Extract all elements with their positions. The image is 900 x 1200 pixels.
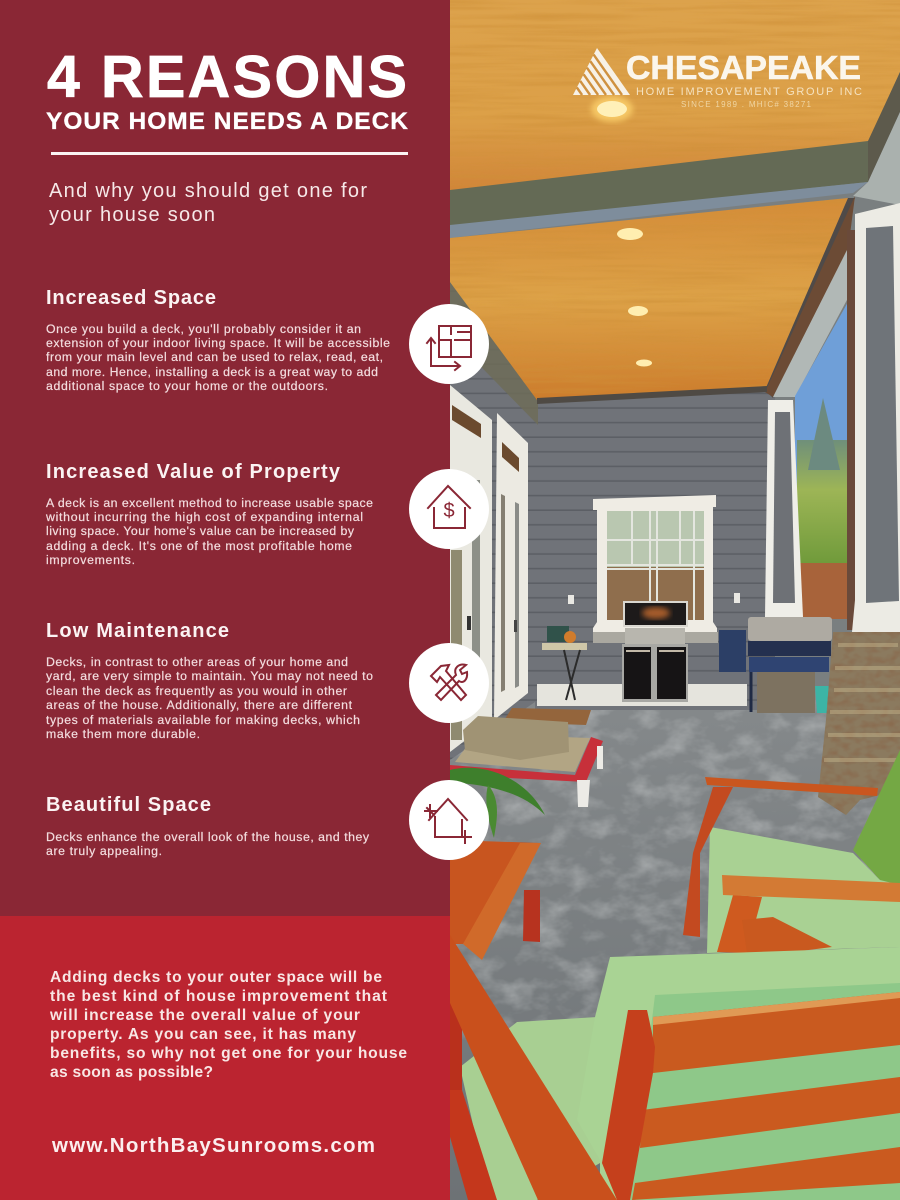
ceiling edge right	[765, 198, 855, 398]
lower ceiling	[450, 198, 848, 400]
light grey fascia	[773, 248, 848, 397]
legs	[577, 746, 603, 807]
body text	[45, 496, 373, 567]
closing text: benefits, so why not get one for your house	[50, 1045, 407, 1062]
body text: extension of your indoor living space. It will be accessible	[46, 336, 390, 350]
large column	[818, 203, 900, 815]
blue lower	[749, 657, 829, 672]
column trim	[765, 400, 803, 617]
section: increased space	[46, 287, 390, 393]
left panel	[0, 0, 450, 916]
section: low maintenance	[46, 620, 373, 741]
right soffit lower	[765, 196, 855, 397]
stone base	[818, 632, 900, 815]
rear leg	[683, 787, 733, 937]
door glass right	[515, 502, 519, 688]
stone highlights	[824, 645, 900, 760]
column panel	[866, 226, 899, 603]
bottom panel	[0, 916, 450, 1200]
grill	[593, 602, 718, 702]
back wall	[535, 385, 775, 710]
logo name: CHESAPEAKE	[626, 49, 861, 86]
front leg	[717, 895, 762, 953]
body text	[46, 830, 370, 858]
subtitle	[49, 180, 367, 226]
door 1	[450, 385, 492, 752]
small column	[765, 400, 803, 617]
leaves	[450, 768, 545, 815]
icon: crossed tools	[409, 643, 489, 723]
slat 3	[632, 1147, 900, 1200]
control panel	[625, 628, 685, 644]
closing text: as soon as possible?	[50, 1064, 213, 1081]
light 2	[617, 228, 643, 240]
door handle	[514, 620, 517, 632]
photo base	[450, 72, 900, 690]
lid	[624, 602, 687, 626]
door handle	[467, 616, 471, 630]
slat 1 top edge	[653, 992, 900, 1025]
cushion bed	[450, 716, 603, 807]
right soffit upper	[868, 72, 900, 182]
table legs	[564, 650, 580, 700]
sky and trees view	[795, 302, 848, 619]
conifer	[808, 398, 840, 470]
body text: are truly appealing.	[46, 844, 162, 858]
upper ceiling grain	[450, 0, 897, 118]
orange pot	[564, 631, 576, 643]
side table	[450, 840, 541, 960]
teal bucket	[815, 686, 829, 713]
window	[593, 495, 717, 640]
icon: floor plan	[409, 304, 489, 384]
body text: types of materials available for making decks, which	[46, 713, 360, 727]
body text: clean the deck as frequently as you would in other	[46, 684, 347, 698]
slat 1	[653, 992, 900, 1073]
logo since: SINCE 1989 . MHIC# 38271	[681, 100, 812, 109]
body text: yard, are very simple to maintain. You may not need to	[46, 669, 373, 683]
back cushion	[577, 947, 900, 1200]
door frame	[450, 385, 492, 752]
icon: house with dollar	[409, 469, 489, 549]
control box	[719, 630, 746, 672]
lower ceiling grain	[452, 232, 802, 382]
body text: from your main level and can be used to relax, read, eat,	[46, 350, 383, 364]
support block	[742, 917, 832, 953]
section: beautiful space	[46, 794, 370, 858]
back cushion	[853, 750, 900, 885]
body text: adding a deck. It's one of the most profitable home	[46, 539, 352, 553]
body text: Decks enhance the overall look of the house, and they	[46, 830, 370, 844]
side shelves	[593, 632, 718, 643]
handles	[626, 650, 684, 652]
body text: make them more durable.	[46, 727, 200, 741]
front arm	[722, 875, 900, 902]
stone texture	[818, 632, 900, 815]
door glass right	[472, 480, 480, 658]
lower leaf	[486, 785, 497, 838]
website url: www.NorthBaySunrooms.com	[51, 1134, 375, 1157]
window muntins	[607, 511, 704, 620]
white trim	[852, 203, 900, 632]
column panel	[773, 412, 795, 603]
cabinet doors	[624, 647, 686, 699]
body text: and more. Hence, installing a deck is a great way to add	[46, 365, 378, 379]
body text: additional space to your home or the outdoors.	[46, 379, 328, 393]
heading: Low Maintenance	[46, 620, 229, 642]
floor texture	[450, 700, 900, 1040]
door frame	[494, 413, 528, 720]
silver lid	[748, 617, 832, 641]
logo tagline: HOME IMPROVEMENT GROUP INC	[636, 86, 862, 98]
subtitle: your house soon	[49, 204, 215, 226]
table leg	[523, 890, 540, 942]
photo background: floor	[450, 692, 826, 1200]
left wall	[450, 368, 535, 760]
smoker	[719, 617, 832, 713]
body text: A deck is an excellent method to increase usable space	[46, 496, 373, 510]
closing text: property. As you can see, it has many	[50, 1026, 356, 1043]
photo: covered deck	[450, 0, 900, 1200]
light 3	[628, 306, 648, 316]
ceiling bottom edge	[537, 386, 767, 404]
left wall upper shading	[450, 282, 538, 425]
body text: without incurring the high cost of expanding internal	[45, 510, 363, 524]
body text	[46, 655, 373, 741]
window glass lower	[607, 567, 704, 620]
sky	[795, 304, 847, 486]
window trim	[593, 495, 717, 640]
switch plates	[568, 593, 740, 604]
blue drum	[748, 641, 831, 656]
fence	[798, 563, 848, 619]
ceiling lights	[591, 96, 652, 366]
body text: Decks, in contrast to other areas of your home and	[46, 655, 348, 669]
front chair	[450, 935, 900, 1200]
beam side	[450, 141, 868, 226]
icon: sparkling house	[409, 780, 489, 860]
body text: living space. Your home's value can be increased by	[46, 524, 355, 538]
upper ceiling	[450, 0, 900, 193]
seat	[460, 1017, 610, 1200]
trees	[797, 440, 848, 565]
body text	[46, 322, 390, 393]
door glass left	[501, 494, 505, 692]
table top slats	[450, 840, 541, 944]
body text: Once you build a deck, you'll probably consider it an	[46, 322, 361, 336]
light glow 1	[591, 96, 633, 122]
closing text: the best kind of house improvement that	[50, 988, 387, 1005]
window glass upper	[607, 511, 704, 567]
closing text: Adding decks to your outer space will be	[50, 969, 382, 986]
closing text	[49, 969, 407, 1081]
icon: house with dollar: $	[443, 500, 455, 522]
baseboard	[537, 684, 747, 706]
section: increased value	[45, 461, 373, 567]
title line 1: 4 REASONS	[47, 44, 407, 110]
closing text: will increase the overall value of your	[49, 1007, 360, 1024]
small table	[542, 626, 587, 700]
transom glass	[502, 442, 519, 472]
subtitle: And why you should get one for	[49, 180, 367, 202]
folded cushion	[463, 716, 569, 760]
big arm	[450, 935, 617, 1200]
title line 2: YOUR HOME NEEDS A DECK	[46, 108, 408, 135]
heading: Increased Space	[46, 287, 216, 309]
light 1	[597, 101, 627, 117]
items on table	[547, 626, 569, 642]
logo	[573, 48, 862, 109]
cabinet	[622, 644, 688, 702]
transom glass	[452, 405, 481, 438]
beam underside	[450, 182, 868, 238]
seat cushion	[707, 827, 900, 953]
upright	[602, 1010, 655, 1200]
left strip	[450, 1000, 462, 1090]
title	[46, 44, 408, 135]
slat 2	[640, 1077, 900, 1148]
rear arm	[705, 777, 878, 796]
door 2	[494, 413, 528, 720]
back chair	[683, 750, 900, 953]
cushion lower shade	[630, 983, 900, 1200]
heading: Increased Value of Property	[46, 461, 341, 483]
table rail	[463, 843, 541, 960]
body text: areas of the house. Additionally, there are different	[46, 698, 353, 712]
light 4	[636, 360, 652, 366]
logo triangle	[573, 48, 630, 95]
body text: improvements.	[46, 553, 135, 567]
table top	[542, 643, 587, 650]
lid glow	[642, 607, 670, 619]
plant	[450, 768, 545, 838]
stone base behind smoker	[757, 672, 815, 713]
heading: Beautiful Space	[46, 794, 211, 816]
lower left leg	[450, 1087, 497, 1200]
door glass	[451, 550, 462, 740]
smoker legs	[750, 672, 752, 712]
brown strip	[847, 230, 855, 630]
mattress	[455, 734, 590, 772]
frame	[450, 737, 603, 782]
doormat	[503, 708, 591, 725]
light grey eave	[853, 112, 900, 205]
title rule	[51, 152, 408, 155]
